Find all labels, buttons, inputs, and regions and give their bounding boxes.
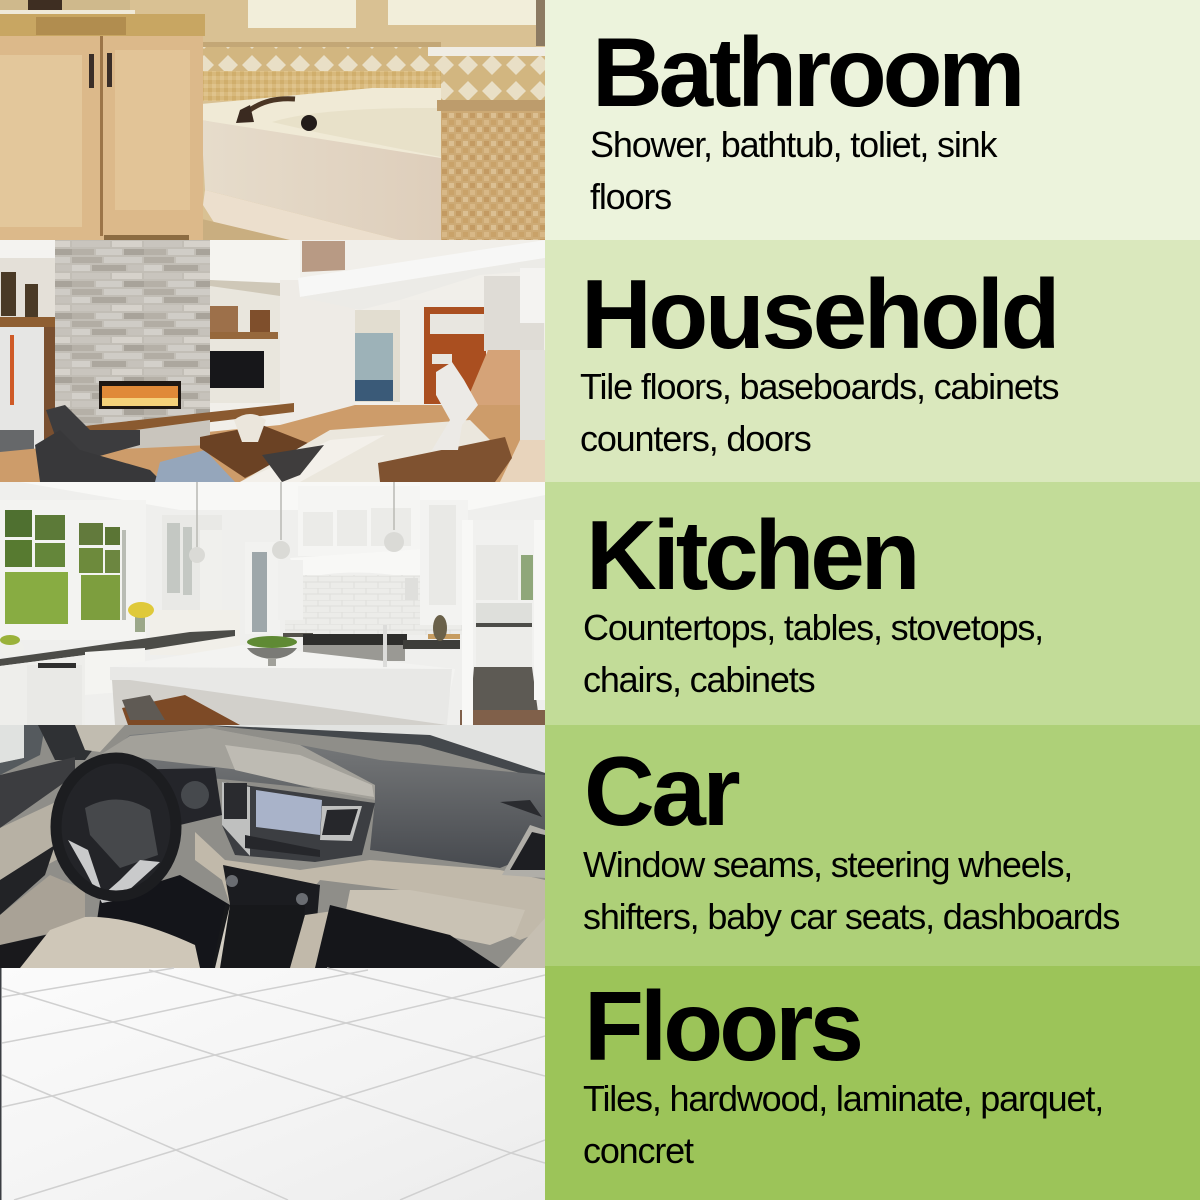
- text: floor surfaces: Tiles, hardwood, laminate, parquet,: [583, 1078, 1103, 1119]
- heading: Bathroom: Bathroom: [592, 17, 1021, 127]
- photo: kitchen: [0, 482, 545, 725]
- text: kitchen surfaces: chairs, cabinets: [583, 659, 814, 700]
- heading: Floors: Floors: [584, 971, 860, 1081]
- text: household surfaces: [580, 366, 1058, 459]
- text: bathroom surfaces: Shower, bathtub, toliet, sink: [590, 124, 996, 165]
- photo: bathroom: [0, 0, 545, 240]
- text: floor surfaces: [583, 1078, 1103, 1171]
- text: car surfaces: [583, 844, 1120, 937]
- text: car surfaces: shifters, baby car seats, dashboards: [583, 896, 1119, 937]
- text: bathroom surfaces: floors: [590, 176, 671, 217]
- text: floor surfaces: concret: [583, 1130, 693, 1171]
- text: household surfaces: counters, doors: [580, 418, 811, 459]
- heading: Kitchen: Kitchen: [586, 500, 916, 610]
- heading: Car: Car: [584, 736, 737, 846]
- photo: household: [0, 240, 545, 482]
- text: car surfaces: Window seams, steering wheels,: [583, 844, 1072, 885]
- photo collage: [0, 0, 545, 1200]
- text: kitchen surfaces: [583, 607, 1043, 700]
- panel: household: [545, 240, 1200, 482]
- photo: car: [0, 725, 545, 968]
- photo: floors: [0, 968, 545, 1200]
- text: bathroom surfaces: [590, 124, 998, 217]
- text: kitchen surfaces: Countertops, tables, stovetops,: [583, 607, 1043, 648]
- text: household surfaces: Tile floors, baseboards, cabinets: [580, 366, 1058, 407]
- panel: kitchen: [545, 482, 1200, 725]
- panel: bathroom: [545, 0, 1200, 240]
- panel: car: [545, 725, 1200, 966]
- panel: floors: [545, 966, 1200, 1200]
- heading: Household: Household: [581, 259, 1057, 369]
